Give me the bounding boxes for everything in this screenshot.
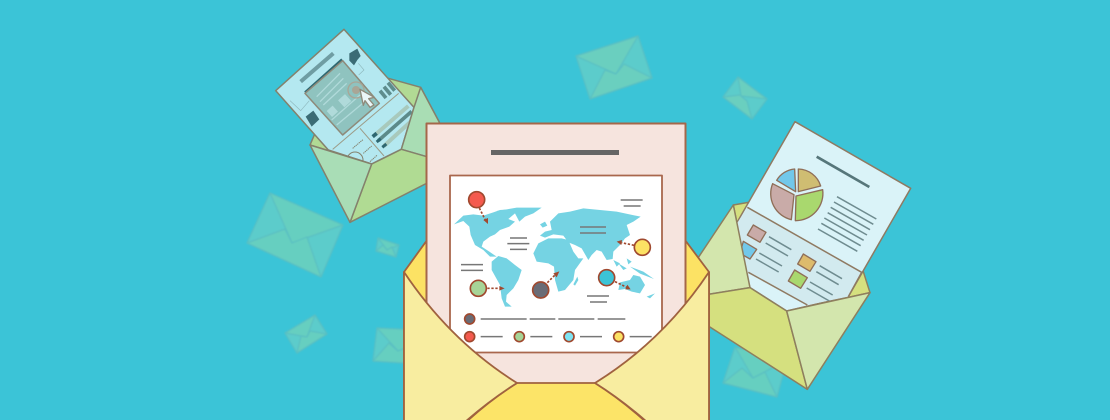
right envelope back <box>733 202 870 311</box>
document title bar <box>491 150 619 155</box>
ghost envelope 2 <box>376 238 399 257</box>
right envelope with pie chart document <box>683 122 911 389</box>
background ghost envelopes <box>247 36 787 397</box>
ghost envelope 4 <box>373 328 420 364</box>
left envelope back <box>310 78 439 164</box>
ghost envelope 7 <box>723 347 787 397</box>
ghost envelope 1 <box>247 193 343 277</box>
left envelope right flap <box>401 87 460 166</box>
main envelope right front flap <box>595 272 709 420</box>
main document sheet <box>426 124 686 388</box>
map markers and arrows <box>469 192 650 298</box>
ghost envelope 3 <box>285 315 327 353</box>
map panel <box>450 176 662 352</box>
left document sheet <box>276 29 414 168</box>
map label lines <box>461 200 643 302</box>
left envelope with web page document <box>276 29 460 222</box>
right document sheet <box>733 122 911 311</box>
right envelope front <box>683 288 870 389</box>
main yellow envelope <box>404 124 709 420</box>
dark folder icons <box>306 49 361 127</box>
main envelope back flap <box>404 236 709 420</box>
pie chart <box>771 169 823 221</box>
cursor icon <box>360 89 374 107</box>
left envelope front <box>310 145 460 222</box>
main envelope left front flap <box>404 272 517 420</box>
ghost envelope 6 <box>723 77 767 119</box>
main envelope bottom flap <box>464 383 648 420</box>
ghost envelope 5 <box>576 36 652 99</box>
world map <box>454 208 655 307</box>
map legend <box>465 314 652 342</box>
right envelope left flap <box>683 205 750 298</box>
